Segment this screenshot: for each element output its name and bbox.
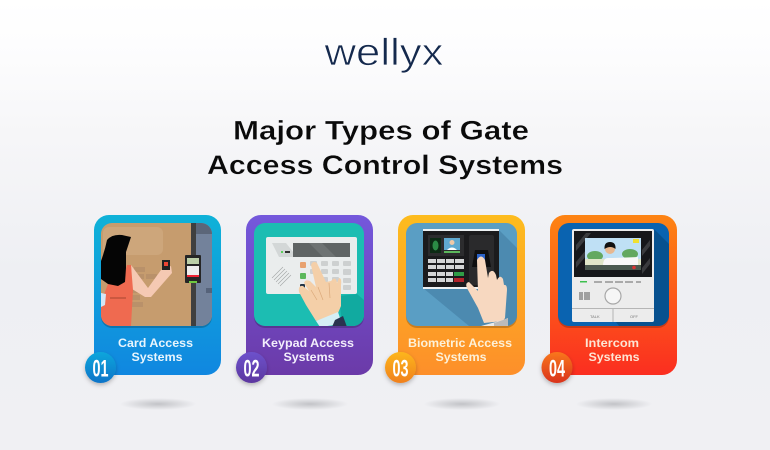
title xyxy=(207,116,563,180)
badge 04: 04 xyxy=(549,356,565,382)
label: Systems xyxy=(132,350,183,364)
woman xyxy=(131,265,172,297)
label: Systems xyxy=(588,350,640,364)
badge 02 xyxy=(236,352,267,383)
label: Systems xyxy=(284,350,335,364)
floor shadows xyxy=(120,398,652,410)
badge 03 xyxy=(385,352,416,383)
label xyxy=(118,336,193,364)
label xyxy=(585,336,640,364)
badge 01 xyxy=(85,352,116,383)
illustration: video intercom: OFF xyxy=(630,314,639,319)
panel: intercom systems xyxy=(542,215,677,383)
title: Access Control Systems xyxy=(207,150,563,180)
badge 01: 01 xyxy=(92,356,108,382)
panel: biometric access systems xyxy=(385,215,525,383)
label: Biometric Access xyxy=(408,336,512,350)
label xyxy=(262,336,354,364)
badge 02: 02 xyxy=(244,356,260,382)
panel: keypad access systems xyxy=(236,215,373,383)
badge 03: 03 xyxy=(392,356,408,382)
label: Systems xyxy=(436,350,487,364)
badge 04 xyxy=(542,352,572,383)
label: Intercom xyxy=(585,336,639,350)
panel: card access systems xyxy=(85,215,221,383)
label: Card Access xyxy=(118,336,193,350)
illustration: woman with access card xyxy=(101,223,212,328)
title: Major Types of Gate xyxy=(233,116,529,146)
illustration: keypad and hand xyxy=(254,223,364,328)
illustration: fingerprint terminal and hand xyxy=(406,223,517,328)
label: Keypad Access xyxy=(262,336,354,350)
illustration: video intercom: TALK xyxy=(590,314,600,319)
logo: wellyx: wellyx xyxy=(323,32,444,74)
label xyxy=(408,336,512,364)
illustration: video intercom xyxy=(558,223,669,328)
